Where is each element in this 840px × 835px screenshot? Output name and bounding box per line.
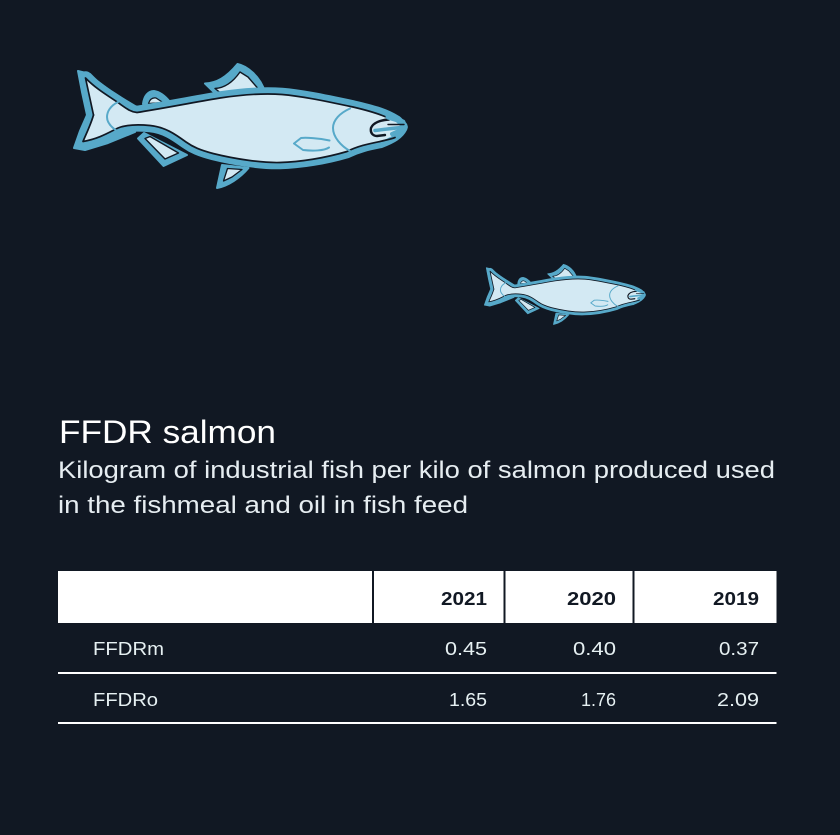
- subtitle text block: [58, 457, 775, 519]
- table row: FFDRm: FFDRm: [93, 638, 164, 659]
- icon: small salmon: [484, 264, 645, 324]
- table header row: 2019: [713, 588, 759, 609]
- table row: FFDRm: 0.45: [445, 638, 487, 659]
- table row: FFDRm: [58, 638, 776, 674]
- table header row: 2021: [441, 588, 487, 609]
- subtitle text block: in the fishmeal and oil in fish feed: [58, 492, 468, 519]
- table row: FFDRo: 2.09: [717, 689, 759, 710]
- table row: FFDRo: 1.76: [581, 689, 616, 710]
- table row: FFDRm: 0.37: [719, 638, 759, 659]
- table row: FFDRo: [58, 689, 776, 724]
- icon: large salmon: [74, 64, 406, 188]
- table row: FFDRo: FFDRo: [93, 689, 158, 710]
- table row: FFDRm: 0.40: [573, 638, 616, 659]
- table header row: [58, 571, 776, 623]
- table header row: 2020: [567, 588, 616, 609]
- table row: FFDRo: 1.65: [449, 689, 487, 710]
- subtitle text block: Kilogram of industrial fish per kilo of salmon produced used: [58, 457, 775, 484]
- title: FFDR salmon: [59, 414, 276, 450]
- table: [58, 571, 776, 724]
